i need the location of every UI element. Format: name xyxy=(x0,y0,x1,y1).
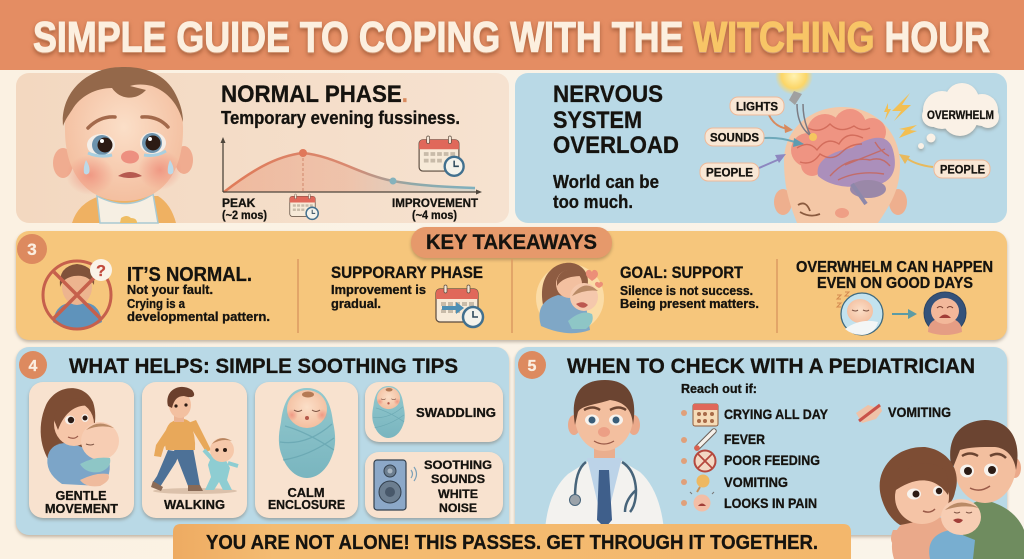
panel: what helps xyxy=(16,347,509,535)
takeaway: supporary phase: gradual. xyxy=(331,297,381,311)
panel: key takeaways xyxy=(16,227,1007,340)
heading: SYSTEM xyxy=(553,107,642,134)
badge 5: 5 xyxy=(528,358,537,375)
badge 4 xyxy=(19,351,47,379)
takeaway: it's normal: Crying is a xyxy=(127,297,186,311)
icon: calendar xyxy=(693,404,718,426)
card: soothing sounds: SOUNDS xyxy=(431,472,485,486)
label: peak: PEAK xyxy=(222,196,256,210)
card: swaddling xyxy=(365,382,503,442)
icon: light bulb xyxy=(776,73,817,141)
badge 5 xyxy=(518,351,546,379)
takeaway: overwhelm can happen: EVEN ON GOOD DAYS xyxy=(817,275,973,292)
panel: normal phase xyxy=(16,67,509,223)
card: gentle movement: MOVEMENT xyxy=(45,502,118,516)
illustration: crying baby xyxy=(53,67,193,223)
card: walking xyxy=(142,382,247,518)
icon: sick face xyxy=(696,474,710,492)
icon: calendar and clock xyxy=(419,136,464,176)
takeaway: goal support: Being present matters. xyxy=(620,297,759,311)
icon: no blame person: ? xyxy=(96,263,106,280)
label: peak xyxy=(222,196,267,222)
takeaway: overwhelm can happen xyxy=(796,259,993,292)
card: soothing sounds: NOISE xyxy=(439,501,477,515)
takeaway: it's normal xyxy=(127,264,270,324)
pill heading: key takeaways xyxy=(411,227,612,258)
card: gentle movement xyxy=(29,382,134,518)
takeaway: goal support xyxy=(620,264,759,311)
illustration: swaddled baby small xyxy=(372,386,405,438)
takeaway: supporary phase: Improvement is xyxy=(331,283,426,297)
takeaway: it's normal: developmental pattern. xyxy=(127,310,270,324)
label: people with arrow left: PEOPLE xyxy=(706,166,753,180)
label: sounds with arrow xyxy=(705,128,804,147)
illustration: swaddled baby large xyxy=(279,388,335,478)
icon: thermometer xyxy=(694,431,714,451)
label: people with arrow right xyxy=(899,154,990,178)
list item: vomiting: VOMITING xyxy=(888,404,951,420)
label: improvement: (~4 mos) xyxy=(412,210,457,222)
heading: normal phase: NORMAL PHASE. xyxy=(221,81,408,108)
illustration: head with brain xyxy=(774,107,907,223)
icon: speaker xyxy=(374,460,416,510)
text: reach out if: Reach out if: xyxy=(681,381,757,396)
badge 3: 3 xyxy=(27,240,37,259)
takeaway: goal support: Silence is not success. xyxy=(620,284,753,298)
icon: lightning bolts xyxy=(884,93,917,138)
badge 4: 4 xyxy=(29,358,38,375)
takeaway: overwhelm can happen: OVERWHELM CAN HAPPEN xyxy=(796,259,993,276)
card: calm enclosure: ENCLOSURE xyxy=(268,497,345,512)
icon: crying baby xyxy=(690,492,714,512)
card: soothing sounds: WHITE xyxy=(438,487,478,501)
list: warning signs: FEVER xyxy=(724,431,765,447)
banner: you are not alone xyxy=(173,524,851,559)
label: people with arrow right: PEOPLE xyxy=(940,162,985,176)
list: warning signs: CRYING ALL DAY xyxy=(724,406,829,422)
text: world can be too much: too much. xyxy=(553,191,633,212)
icon: mother hugging baby xyxy=(536,263,604,333)
thought cloud: overwhelm: OVERWHELM xyxy=(927,110,994,122)
illustration: mother holding baby xyxy=(41,388,119,486)
label: lights with arrow: LIGHTS xyxy=(736,100,778,114)
heading: OVERLOAD xyxy=(553,132,679,159)
card: calm enclosure: CALM xyxy=(288,485,324,500)
takeaway: it's normal: Not your fault. xyxy=(127,283,213,297)
list: warning signs: POOR FEEDING xyxy=(724,452,820,468)
badge 3 xyxy=(17,234,47,264)
thought cloud: overwhelm xyxy=(918,83,999,149)
heading: NERVOUS xyxy=(553,81,663,108)
panel: nervous system overload xyxy=(515,57,1007,223)
heading xyxy=(553,81,679,159)
heading: what helps: WHAT HELPS: SIMPLE SOOTHING TIPS xyxy=(69,354,458,378)
icon: calendar with arrow xyxy=(436,285,483,327)
text: world can be too much xyxy=(553,171,659,212)
illustration: parent walking with baby xyxy=(151,387,238,494)
banner: you are not alone: YOU ARE NOT ALONE! THIS PASSES. GET THROUGH IT TOGETHER. xyxy=(206,532,818,554)
label: sounds with arrow: SOUNDS xyxy=(710,130,759,144)
card: calm enclosure xyxy=(255,382,358,518)
icon: no blame person xyxy=(43,259,112,329)
subheading: Temporary evening fussiness. xyxy=(221,108,460,128)
takeaway: supporary phase xyxy=(331,264,483,311)
takeaway: it's normal: IT’S NORMAL. xyxy=(127,264,252,286)
title: SIMPLE GUIDE TO COPING WITH THE WITCHING HOUR xyxy=(33,14,990,62)
header banner xyxy=(0,0,1024,70)
icon: small calendar xyxy=(290,194,318,219)
label: lights with arrow xyxy=(730,97,793,133)
text: world can be too much: World can be xyxy=(553,171,659,192)
label: improvement: IMPROVEMENT xyxy=(392,196,479,210)
card: soothing sounds: SOOTHING xyxy=(424,458,492,472)
label: improvement xyxy=(392,196,479,222)
illustration: family hugging baby xyxy=(880,420,1024,559)
card: swaddling: SWADDLING xyxy=(416,406,496,420)
takeaway: goal support: GOAL: SUPPORT xyxy=(620,264,743,282)
label: peak: (~2 mos) xyxy=(222,210,267,222)
card: walking: WALKING xyxy=(164,497,225,512)
illustration: doctor xyxy=(545,380,664,530)
card: gentle movement: GENTLE xyxy=(56,489,106,503)
takeaway: supporary phase: SUPPORARY PHASE xyxy=(331,264,483,282)
list: warning signs: LOOKS IN PAIN xyxy=(724,495,817,511)
list: warning signs xyxy=(681,404,829,512)
card: soothing sounds xyxy=(365,452,503,518)
icon: no food xyxy=(694,450,716,472)
list: warning signs: VOMITING xyxy=(724,474,788,490)
panel: when to check with a pediatrician xyxy=(515,347,1007,535)
chart: fussiness curve xyxy=(220,137,482,194)
icon: sleeping baby to crying baby xyxy=(837,292,966,335)
label: people with arrow left xyxy=(700,154,786,181)
list item: vomiting xyxy=(856,404,951,423)
pill heading: key takeaways: KEY TAKEAWAYS xyxy=(426,231,597,254)
heading: when to check: WHEN TO CHECK WITH A PEDIATRICIAN xyxy=(567,354,975,378)
